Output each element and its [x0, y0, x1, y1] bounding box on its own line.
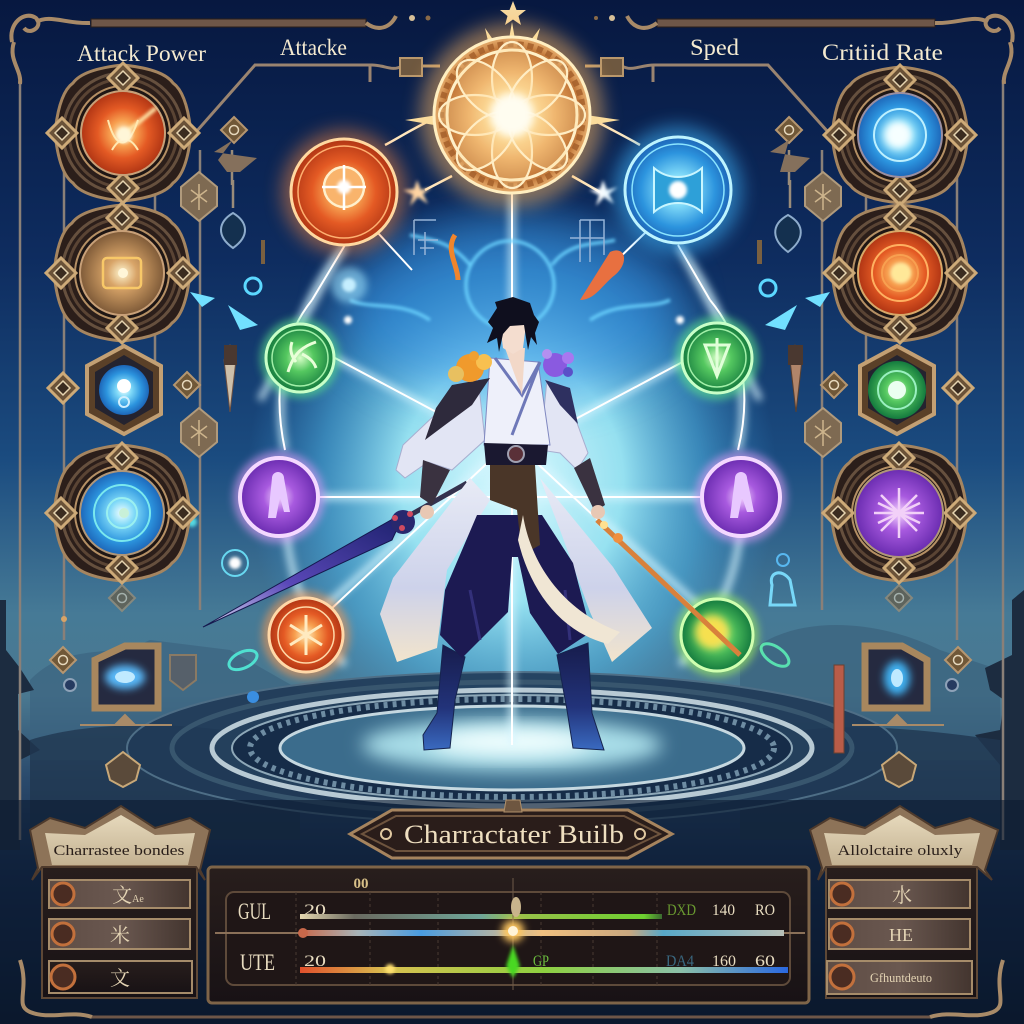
stat row 1 labels: 20	[304, 902, 326, 919]
top marker glyph: 00	[354, 876, 368, 892]
stat row 1 labels: GUL	[238, 899, 271, 924]
panel: center stat bars	[208, 867, 809, 1003]
stat row 2 labels: DA4	[666, 953, 694, 970]
row 2	[829, 919, 970, 949]
row 1: 文Ae	[112, 884, 144, 907]
stat row 1 labels	[238, 899, 775, 924]
row 2: 米	[110, 924, 130, 947]
row 3: 文	[110, 967, 130, 990]
star on top	[500, 1, 526, 25]
node: top gold lotus orb	[405, 22, 620, 207]
stat row 2 labels: 160	[712, 953, 736, 970]
left sword	[203, 483, 467, 627]
panel: right ability list	[810, 806, 998, 998]
light rays between nodes	[260, 118, 760, 745]
node: purple left orb	[233, 451, 325, 543]
right sleeve	[540, 380, 588, 470]
top ornament bars	[11, 15, 1013, 84]
stat row 2 labels: UTE	[240, 950, 275, 975]
center markers	[385, 878, 524, 990]
left sleeve	[396, 378, 485, 478]
node: orange lower-left orb	[262, 591, 350, 679]
title plaque: character build	[350, 800, 672, 858]
frame: critical blue orb	[824, 65, 976, 205]
frame: red-orange orb	[824, 203, 976, 343]
distant scenery: hills and pagodas	[0, 590, 1024, 850]
stat row 1 labels: DXD	[667, 902, 696, 919]
bar 2	[215, 928, 805, 938]
stat row 2 labels	[240, 950, 775, 975]
frame: gold orb	[46, 203, 198, 343]
bottom frame line	[20, 960, 1003, 1017]
central cyan magic glow	[247, 190, 777, 770]
shoulder flowers	[425, 349, 578, 440]
sash belt	[484, 443, 548, 465]
small charms on left	[48, 57, 265, 787]
row 3	[49, 961, 192, 993]
belt medallion	[508, 446, 524, 462]
row 2: HE	[889, 925, 913, 945]
top labels	[77, 35, 943, 66]
frame: square beast card	[80, 646, 172, 725]
top labels: Attacke	[280, 35, 347, 60]
head: face and hair	[487, 297, 539, 354]
left column: ornate stat frames	[46, 57, 265, 787]
stat row 2 labels: 20	[304, 953, 326, 970]
glowing glyphs and runes around the figure	[187, 180, 830, 703]
frame: large purple orb	[823, 443, 975, 583]
row 1	[829, 880, 970, 908]
connector brackets	[196, 58, 828, 132]
bracers and hands	[420, 460, 450, 505]
heading plaque	[810, 806, 998, 880]
right column: ornate stat frames	[757, 65, 976, 787]
white sash	[518, 515, 620, 644]
row 2	[49, 919, 190, 949]
top labels: Attack Power	[77, 41, 206, 66]
right staff	[597, 520, 740, 655]
title plaque: character build: Charractater Builb	[404, 820, 624, 849]
stat row 2 labels: 60	[755, 953, 775, 970]
heading plaque	[30, 806, 210, 880]
bottom dark vignette	[0, 800, 1024, 1024]
frame: hexagon green gem	[860, 346, 934, 434]
stat row 2 labels: GP	[533, 953, 549, 970]
row 1: 水	[892, 884, 912, 907]
stat row 1 labels: 140	[712, 902, 735, 919]
side frame lines and hanging chains	[20, 80, 1003, 840]
neck	[505, 348, 525, 395]
character: swordsman	[203, 297, 740, 750]
node: green left orb	[260, 318, 340, 398]
frame: square blue card	[852, 646, 944, 725]
stat row 1 labels: RO	[755, 902, 775, 919]
boots	[423, 645, 465, 750]
frame: large blue orb	[46, 443, 198, 583]
node: green-yellow lower-right orb	[675, 593, 759, 677]
small charms on right	[757, 117, 973, 787]
row 3: Gfhuntdeuto	[870, 970, 932, 985]
node: purple right orb	[695, 451, 787, 543]
row 3	[827, 961, 972, 994]
row 1	[49, 880, 190, 908]
bar 3	[300, 967, 788, 973]
frame: attack power orange orb	[47, 63, 199, 203]
frame: hexagon blue gem	[87, 346, 161, 434]
bar 1	[300, 914, 662, 919]
floor: magic circle	[127, 672, 897, 824]
torso robe	[484, 358, 550, 445]
heading plaque: Charrastee bondes	[54, 843, 185, 859]
node: green right orb	[675, 316, 759, 400]
trousers	[440, 515, 591, 658]
node: blue speed orb	[614, 126, 742, 254]
coat back panels	[380, 478, 490, 662]
top labels: Critiid Rate	[822, 40, 943, 65]
top labels: Sped	[690, 35, 740, 60]
heading plaque: Allolctaire oluxly	[838, 843, 963, 859]
node: red-orange attack orb	[282, 130, 406, 254]
brown tassets	[490, 465, 540, 555]
panel: left build list	[30, 806, 210, 998]
